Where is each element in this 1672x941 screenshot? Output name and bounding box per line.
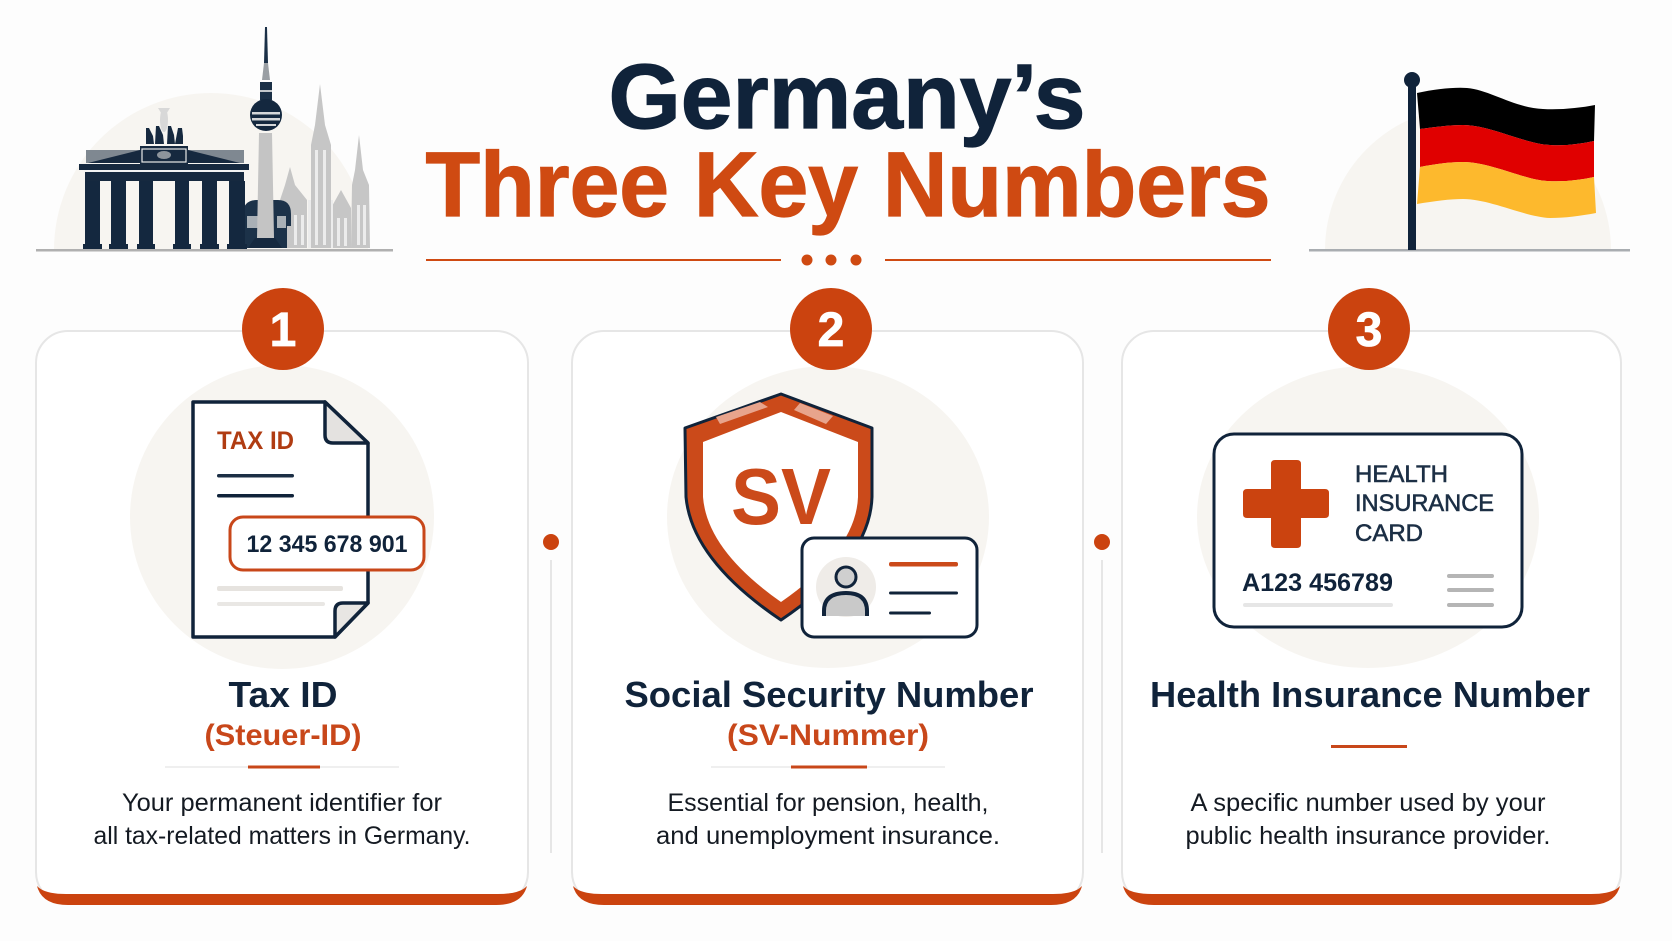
title line 1: Germany’s [608, 46, 1086, 148]
description: A specific number used by your [1190, 789, 1546, 817]
description: Your permanent identifier for [122, 789, 442, 817]
card outline [36, 331, 528, 904]
panel: Tax ID [36, 288, 528, 905]
icon: shield SV: SV [731, 452, 831, 541]
icon: tax document: TAX ID [217, 427, 294, 455]
icon: shield SV [685, 394, 872, 620]
icon background circle [130, 365, 434, 669]
card outline [572, 331, 1083, 904]
subheading: (Steuer-ID) [204, 719, 362, 752]
illustration: Berlin skyline [36, 27, 393, 252]
card bottom accent [1123, 886, 1620, 905]
number badge 3: 3 [1356, 304, 1382, 357]
title divider [426, 254, 1271, 266]
description: and unemployment insurance. [656, 822, 1000, 850]
icon background circle [1197, 366, 1539, 668]
separator [165, 766, 399, 768]
connector 2 [1094, 534, 1110, 853]
icon: health insurance card: HEALTH [1355, 461, 1448, 488]
heading: Health Insurance Number [1150, 674, 1590, 715]
heading: Social Security Number [624, 674, 1034, 715]
number badge 1: 1 [270, 304, 296, 357]
description: all tax-related matters in Germany. [94, 822, 470, 850]
connector 1 [543, 534, 559, 853]
number badge 1 [242, 288, 324, 370]
icon: health insurance card: INSURANCE [1355, 490, 1494, 517]
number badge 2: 2 [818, 304, 844, 357]
icon: tax document: 12 345 678 901 [246, 531, 408, 558]
number badge 3 [1328, 288, 1410, 370]
card bottom accent [573, 886, 1082, 905]
number badge 2 [790, 288, 872, 370]
description: public health insurance provider. [1186, 822, 1550, 850]
icon: health insurance card: CARD [1355, 520, 1423, 547]
card outline [1122, 331, 1621, 904]
separator [711, 766, 945, 768]
illustration: German flag [1309, 72, 1630, 252]
panel: Health Insurance Number [1122, 288, 1621, 905]
icon: health insurance card: A123 456789 [1242, 569, 1393, 597]
subheading: (SV-Nummer) [727, 719, 929, 752]
title line 2: Three Key Numbers [426, 134, 1270, 236]
description [656, 789, 1000, 850]
separator [1331, 745, 1407, 748]
icon: health insurance card [1214, 434, 1522, 627]
title [426, 46, 1270, 236]
icon: ID card [802, 538, 977, 637]
icon background circle [667, 366, 989, 668]
heading: Tax ID [228, 674, 338, 715]
description [1186, 789, 1550, 850]
panel: Social Security Number [572, 288, 1083, 905]
description [94, 789, 470, 850]
icon: tax document [193, 402, 424, 637]
description: Essential for pension, health, [668, 789, 988, 817]
card bottom accent [37, 886, 527, 905]
